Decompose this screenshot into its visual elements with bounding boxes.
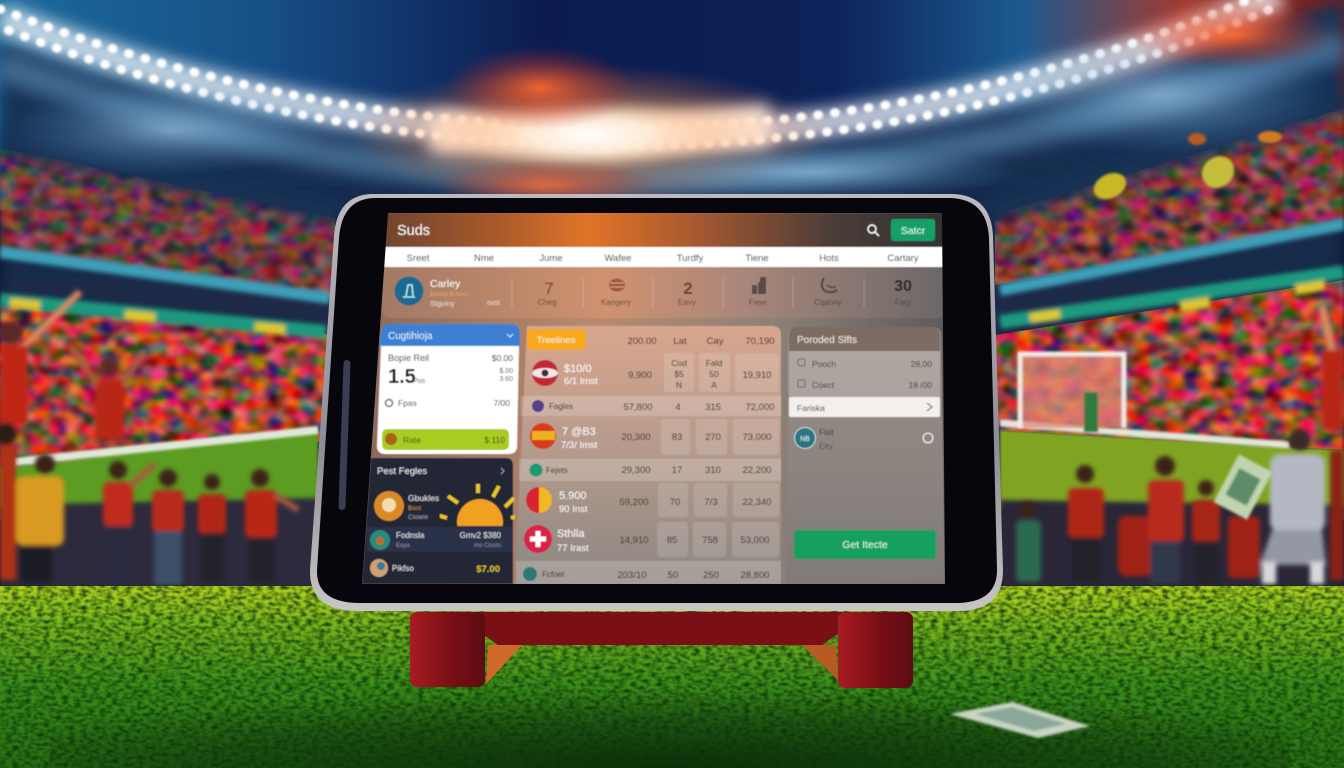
stat dividers <box>512 278 864 308</box>
navigation tabs: Tiene <box>745 253 769 264</box>
sun illustration <box>439 483 516 527</box>
turf blades texture <box>0 586 1344 768</box>
orange light on stand <box>486 645 522 684</box>
stadium roof glow <box>0 45 1344 185</box>
fan red shirt 3 <box>198 474 226 583</box>
fan red shirt 1 <box>103 461 155 584</box>
row: featured three: 7/3 <box>704 497 718 508</box>
bet odds <box>388 368 426 384</box>
promo row two: Gmv2 $380 <box>460 531 502 540</box>
promo heading: Pest Fegles <box>377 466 427 477</box>
lime action bar: $.110 <box>484 435 505 445</box>
lime action bar <box>382 429 509 450</box>
row: featured one: $5 <box>674 369 684 379</box>
team meta: Stgviny <box>430 299 455 308</box>
row: featured four: 14,910 <box>619 535 649 546</box>
tablet glow on turf <box>160 586 1200 666</box>
app title: Suds <box>397 223 430 239</box>
left floodlight wash <box>5 85 335 175</box>
bet name: Bopie Reil <box>388 353 429 363</box>
navigation tabs: Turdfy <box>677 253 704 264</box>
row: foloet <box>516 561 781 584</box>
row: featured two: 83 <box>672 432 682 443</box>
promo row three: $7.00 <box>476 564 500 575</box>
row: fejets: 17 <box>672 465 682 476</box>
flying balls <box>1090 131 1282 204</box>
row: featured one: A <box>711 380 717 390</box>
row: fejets: 29,300 <box>621 465 651 476</box>
promo row one <box>374 491 439 521</box>
fees row <box>386 398 510 408</box>
pitch right sideline <box>1000 423 1290 445</box>
stands backdrop <box>0 0 1344 500</box>
row: foloet: 203/10 <box>617 570 647 581</box>
right stand tier bands <box>1000 224 1344 322</box>
slips list: Coect <box>812 380 835 390</box>
table header: 200.00 <box>627 336 657 347</box>
row: featured four: 77 Irast <box>557 543 589 554</box>
flying banknote <box>1214 454 1272 520</box>
odds table panel <box>515 326 781 584</box>
row: fejets: Fejets <box>546 466 568 475</box>
stat: two: Eavy <box>678 298 696 307</box>
row: featured one: 9,900 <box>628 370 652 381</box>
stat: coin icon: Kangery <box>601 298 631 307</box>
advertising boards left <box>0 498 318 590</box>
team badge <box>394 276 424 306</box>
team subtitle: Bored tit hiss <box>430 291 468 298</box>
upper crowd right <box>995 108 1344 285</box>
header button <box>891 219 935 241</box>
row: fejets <box>519 459 781 481</box>
match badge <box>794 428 816 448</box>
tablet bezel <box>317 198 997 603</box>
search icon <box>868 225 879 236</box>
row: featured two: 7/3/ Imst <box>561 440 598 451</box>
row: featured one: 50 <box>709 369 719 379</box>
row: featured two: 7 @B3 <box>562 426 596 438</box>
soft top edge of upper crowds <box>0 102 1344 214</box>
haze below arc <box>600 144 1020 200</box>
stand leg left <box>410 612 485 687</box>
row: eagles <box>521 396 781 416</box>
promo row two: Eaya <box>396 543 410 549</box>
navigation tabs: Jume <box>539 253 563 264</box>
row: eagles: 4 <box>675 402 681 413</box>
row: featured four <box>524 522 779 557</box>
promo row one: Gbukles <box>408 493 439 503</box>
orange flare above arc <box>445 46 635 130</box>
row: featured one: 6/1 Imst <box>564 376 598 387</box>
bet odds: Pos <box>413 378 426 385</box>
slips heading: Poroded Slfts <box>797 335 857 346</box>
floodlight lamps upper row <box>0 0 1280 128</box>
table header: 70,190 <box>745 336 775 347</box>
row: eagles: 72,000 <box>745 402 775 413</box>
row: foloet: 28,800 <box>740 570 770 581</box>
row: featured two <box>530 419 779 455</box>
orange flare above tablet <box>435 160 655 210</box>
row: featured three: 70 <box>670 497 680 508</box>
slips list: 28,00 <box>911 359 932 369</box>
green action button <box>794 530 936 559</box>
floodlight lamps lower row <box>0 5 1280 146</box>
match text: Eiry <box>819 442 833 451</box>
row: fejets: 310 <box>705 465 721 476</box>
navigation tabs: Sreet <box>407 253 430 264</box>
row: featured three <box>526 483 779 517</box>
navigation tabs: Nme <box>474 253 494 264</box>
cheering fans right <box>1016 306 1344 584</box>
slips heading <box>789 327 940 351</box>
lower crowd right <box>996 280 1344 450</box>
table header: Treelines <box>537 335 576 346</box>
fan yellow shirt <box>16 454 64 583</box>
left stand tier bands <box>0 252 330 332</box>
orange light on stand right <box>802 645 838 680</box>
upper crowd left <box>0 148 335 300</box>
lower crowd left <box>0 305 327 470</box>
promo row one: Bost <box>408 505 421 512</box>
row: featured three: 5.900 <box>559 490 587 502</box>
slips list: Pooch <box>812 359 836 369</box>
pitch left <box>0 430 318 520</box>
row: featured one: 19,910 <box>742 370 772 381</box>
selected row <box>789 397 940 417</box>
stat: thirty: 30 <box>894 278 912 295</box>
row: featured four: 758 <box>702 535 718 546</box>
row: featured four: 85 <box>667 535 677 546</box>
grass field <box>0 586 1344 768</box>
fan 2 <box>1068 465 1104 583</box>
fees row: 7/00 <box>493 398 510 408</box>
turf base <box>0 586 1344 768</box>
bet small values: 3.60 <box>499 376 513 383</box>
row: eagles: Fagles <box>549 402 573 411</box>
row: foloet: 50 <box>668 570 678 581</box>
bet small values: $.00 <box>499 368 513 375</box>
row: foloet: 250 <box>703 570 719 581</box>
row: eagles: 315 <box>705 402 721 413</box>
stat: two: 2 <box>683 279 693 298</box>
card header: Cugtihioja <box>388 331 433 342</box>
row: featured one: Fald <box>706 358 723 368</box>
betting slips panel <box>787 327 945 584</box>
advertising boards right <box>1000 500 1344 590</box>
bet amount: $0.00 <box>492 353 513 363</box>
promo row two: Fodnsla <box>396 531 425 540</box>
left bet card <box>377 324 520 454</box>
row: featured one: N <box>676 380 682 390</box>
promo arrow <box>501 468 504 474</box>
promo row two: mo Cloots <box>474 543 501 549</box>
stat: two <box>678 279 696 307</box>
team name: Carley <box>430 278 461 290</box>
stat: bars icon: Fieer <box>749 298 767 307</box>
navigation tabs: Cartary <box>887 253 919 264</box>
selected row: Fariska <box>797 403 825 413</box>
fan 4 <box>1148 456 1184 584</box>
lime action bar: Rate <box>403 435 421 445</box>
row: featured four: Sthlla <box>557 528 585 540</box>
row: featured one: $10/0 <box>564 363 592 375</box>
card body <box>377 346 519 454</box>
cheering fans left <box>0 292 298 585</box>
promo row two <box>367 527 513 552</box>
promo row one: Clotele <box>408 514 429 521</box>
table header: Cay <box>707 336 724 347</box>
player in white <box>1260 429 1326 584</box>
navigation tabs: Hots <box>819 253 839 264</box>
fan 5 <box>1192 480 1220 584</box>
central white band <box>430 125 770 135</box>
stand crossbar <box>470 612 850 645</box>
stat: thirty <box>894 278 912 307</box>
stat: moon icon: Cqanny <box>814 298 842 307</box>
table header <box>527 329 775 350</box>
match text: Fisit <box>819 428 834 437</box>
raised arm fan <box>1322 306 1344 430</box>
row: featured three: 59,200 <box>619 497 649 508</box>
night sky <box>0 0 1344 210</box>
stats strip <box>382 267 944 318</box>
promo row three <box>370 559 500 577</box>
stat: coin icon <box>601 278 631 307</box>
slips list: 18 /00 <box>908 380 932 390</box>
floodlight arc glow <box>0 0 1280 137</box>
row: eagles: 57,800 <box>623 402 653 413</box>
tablet stand <box>410 612 913 688</box>
stat: bars icon <box>749 277 767 307</box>
row: featured one: Cod <box>671 358 687 368</box>
green action button: Get Itecte <box>842 539 888 551</box>
stat: seven <box>538 282 556 307</box>
row: featured two: 270 <box>705 432 721 443</box>
fees row: Fpas <box>398 398 417 408</box>
team meta value: ovst <box>487 300 500 307</box>
stat: moon icon <box>814 278 842 307</box>
match text <box>819 428 834 451</box>
row: fejets: 22,200 <box>742 465 772 476</box>
goal <box>1020 354 1124 432</box>
navigation tabs <box>384 247 944 267</box>
row: featured one <box>532 353 779 392</box>
dark promo panel <box>362 458 518 584</box>
stat: thirty: Fary <box>895 298 911 307</box>
right floodlight wash <box>990 35 1330 155</box>
fan 1 <box>1016 502 1041 582</box>
radio button <box>923 433 933 443</box>
fan 3 <box>1118 516 1152 576</box>
turf shadow <box>50 640 1290 768</box>
tablet shell <box>310 194 1003 611</box>
bet small values <box>499 368 513 383</box>
tablet <box>310 194 1003 611</box>
pitch right <box>1000 430 1344 520</box>
stat: seven: 7 <box>544 279 554 298</box>
red flare top right <box>1130 1 1340 69</box>
header button: Satcr <box>901 225 926 237</box>
stand leg right <box>838 612 913 688</box>
fan 6 <box>1228 516 1260 578</box>
banknote on grass <box>950 702 1090 738</box>
row: featured two: 73,000 <box>742 432 772 443</box>
row: foloet: Fcfoet <box>542 570 565 579</box>
app screen <box>360 212 950 585</box>
row: featured two: 20,300 <box>621 432 651 443</box>
navigation tabs: Wafee <box>604 253 632 264</box>
promo row three: Pikfso <box>392 564 414 573</box>
screen base <box>360 212 950 585</box>
stadium background <box>0 0 1344 590</box>
app header bar <box>385 213 945 247</box>
row: featured three: 22,340 <box>742 497 772 508</box>
side speaker slot <box>338 360 351 510</box>
table header: Lat <box>673 336 687 347</box>
fan red shirt 4 <box>245 469 298 583</box>
bet odds: 1.5 <box>388 366 416 388</box>
fan red shirt 2 <box>152 469 184 585</box>
card header <box>379 324 520 348</box>
stat: seven: Cheg <box>537 298 557 307</box>
row: featured three: 90 Inst <box>559 504 588 515</box>
slips list <box>789 351 940 397</box>
match badge: NB <box>800 436 810 443</box>
row: featured four: 53,000 <box>740 535 770 546</box>
pitch left sideline <box>14 430 318 462</box>
central flare <box>350 65 830 205</box>
